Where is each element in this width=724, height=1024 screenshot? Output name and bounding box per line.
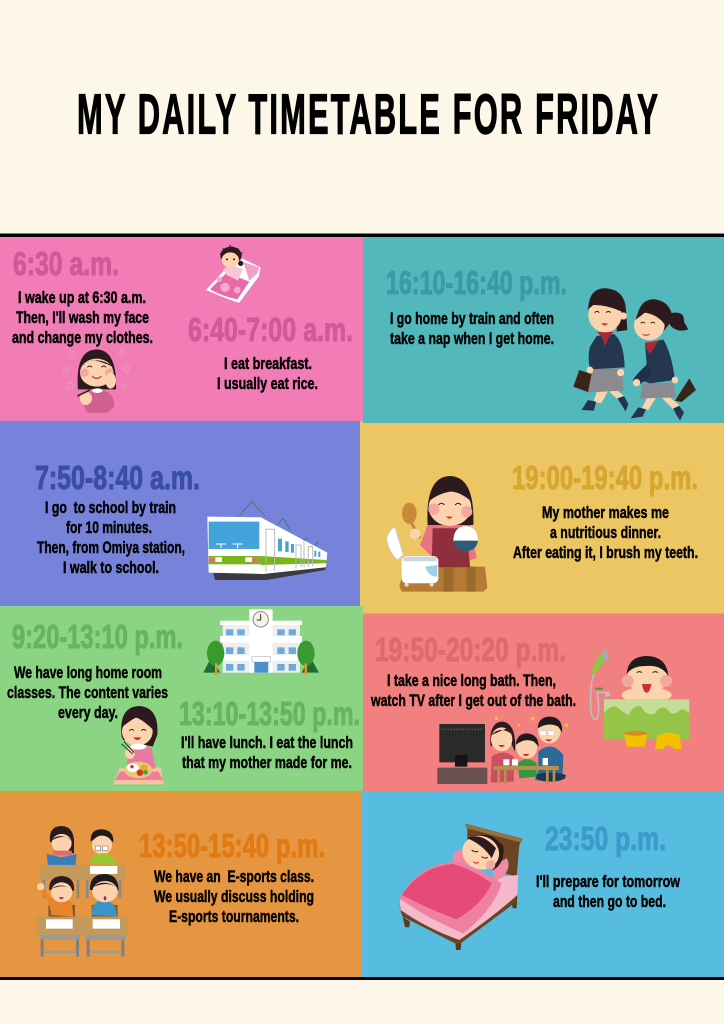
text: bath and TV [370,671,576,710]
text: breakfast: I eat breakfast. [224,354,312,373]
heading: 6:30 a.m.: 6:30 a.m. [13,245,119,282]
panel: 23:50 bedtime [362,791,724,977]
text: e-sports class: We have an E-sports class. [154,867,314,886]
text: bedtime: I'll prepare for tomorrow [536,872,681,891]
heading: 16:10-16:40 p.m.: 16:10-16:40 p.m. [386,264,567,301]
text: e-sports class: E-sports tournaments. [169,907,299,926]
icon: two students walking [573,288,696,421]
rule: top border [0,234,724,237]
icon: train [207,502,327,580]
text: going to school [37,498,185,577]
heading: 23:50 p.m.: 23:50 p.m. [545,820,666,857]
text: lunch: I'll have lunch. I eat the lunch [181,733,353,752]
text: wake up: Then, I'll wash my face [16,308,149,327]
panel: 13:50 e-sports class [0,791,362,977]
text: dinner [513,503,698,562]
text: going to school: I go to school by train [45,498,176,517]
heading: 13:50-15:40 p.m.: 13:50-15:40 p.m. [139,827,325,864]
icon: school building [203,609,319,675]
icon: family watching TV [437,717,568,784]
heading: 9:20-13:10 p.m.: 9:20-13:10 p.m. [12,618,183,655]
text: going to school: Then, from Omiya station, [37,538,185,557]
panel: 9:20 homeroom and lunch [0,606,363,791]
text: bath and TV: I take a nice long bath. Then, [387,671,556,690]
text: e-sports class: We usually discuss holding [154,887,314,906]
panel: 19:50 bath and TV [363,614,724,791]
heading: 6:40-7:00 a.m.: 6:40-7:00 a.m. [188,311,353,348]
panel: 6:30 wake up and breakfast [0,237,363,421]
text: dinner: My mother makes me [542,503,669,522]
text: wake up: and change my clothes. [12,328,153,347]
icon: students in classroom [37,826,128,957]
icon: girl washing face [63,349,130,413]
text: going home: I go home by train and often [390,309,554,328]
text: lunch: that my mother made for me. [182,753,352,772]
panel: 16:10 going home [363,237,724,423]
heading: 7:50-8:40 a.m.: 7:50-8:40 a.m. [35,459,200,496]
text: wake up [12,288,153,347]
text: going to school: I walk to school. [63,558,159,577]
text: homeroom: every day. [58,703,118,722]
text: going home: take a nap when I get home. [390,329,554,348]
text: going to school: for 10 minutes. [66,518,152,537]
text: homeroom [7,663,168,722]
text: bath and TV: watch TV after I get out of the bath. [370,691,576,710]
icon: boy in bath [591,650,689,749]
rule: bottom border [0,977,724,980]
icon: girl sleeping in bed [399,824,523,950]
panel: 7:50 going to school [0,421,360,606]
icon: girl waking up in bed [206,245,261,303]
panel: 19:00 dinner [360,421,724,614]
text: breakfast: I usually eat rice. [217,374,318,393]
text: breakfast [217,354,318,393]
text: homeroom: classes. The content varies [7,683,168,702]
text: wake up: I wake up at 6:30 a.m. [18,288,146,307]
icon: girl eating lunch [113,706,164,784]
text: homeroom: We have long home room [14,663,162,682]
text: bedtime [536,872,681,911]
text: going home [390,309,554,348]
text: bedtime: and then go to bed. [553,892,666,911]
heading: 19:50-20:20 p.m.: 19:50-20:20 p.m. [375,631,566,668]
text: dinner: a nutritious dinner. [550,523,661,542]
text: lunch [181,733,353,772]
heading: 13:10-13:50 p.m.: 13:10-13:50 p.m. [179,695,360,732]
icon: mother cooking rice [387,476,487,592]
text: e-sports class [154,867,314,926]
